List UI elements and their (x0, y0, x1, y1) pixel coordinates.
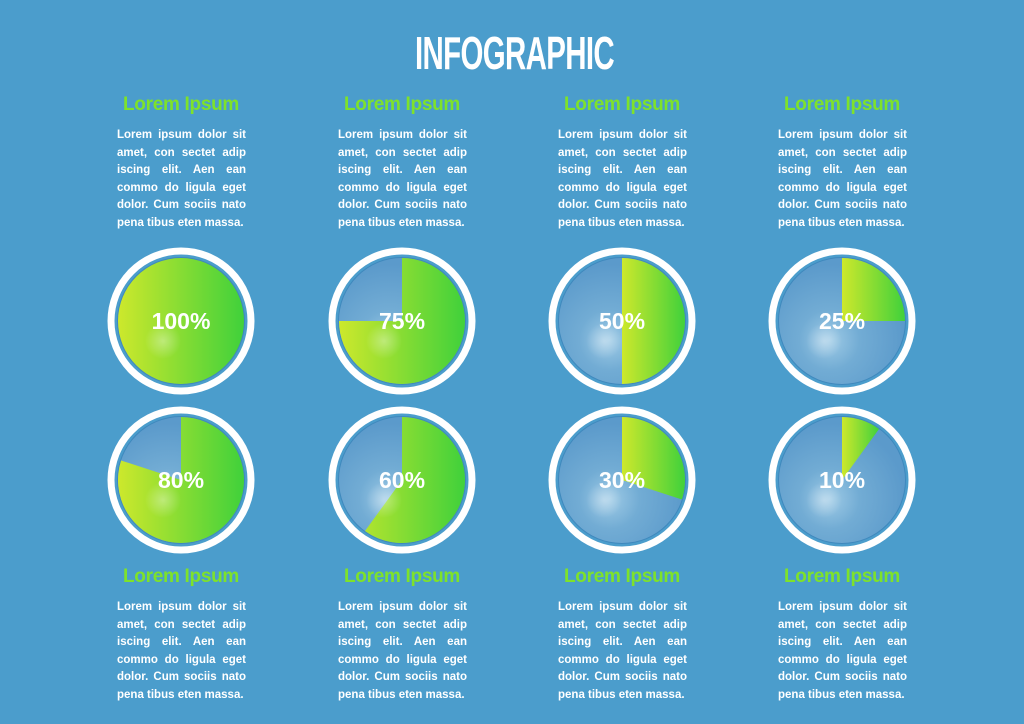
text: col4 bottom (778, 601, 907, 701)
text: col1 bottom: pena tibus eten massa. (117, 689, 244, 701)
text: col4 top: Lorem ipsum dolor sit (778, 129, 907, 141)
heading: col3 bottom: Lorem Ipsum (564, 566, 680, 587)
text: col3 bottom: dolor. Cum sociis nato (558, 671, 687, 683)
text: col2 bottom: Lorem ipsum dolor sit (338, 601, 467, 613)
pie: 30% (552, 410, 692, 550)
text: col4 bottom: dolor. Cum sociis nato (778, 671, 907, 683)
text: col1 top: amet, con sectet adip (117, 147, 246, 159)
text: col2 top: commo do ligula eget (338, 182, 467, 194)
text: col3 bottom: iscing elit. Aen ean (558, 636, 687, 648)
text: col3 top: amet, con sectet adip (558, 147, 687, 159)
heading: col2 top: Lorem Ipsum (344, 94, 460, 115)
pie: 100%: 100% (152, 308, 210, 334)
text: col4 bottom: pena tibus eten massa. (778, 689, 905, 701)
text: col3 top: pena tibus eten massa. (558, 217, 685, 229)
text: col1 bottom: iscing elit. Aen ean (117, 636, 246, 648)
pie: 30%: 30% (599, 467, 645, 493)
pie: 50% (552, 251, 692, 391)
text: col4 top: commo do ligula eget (778, 182, 907, 194)
text: col1 top: commo do ligula eget (117, 182, 246, 194)
text: col3 top: dolor. Cum sociis nato (558, 199, 687, 211)
text: col4 bottom: commo do ligula eget (778, 654, 907, 666)
pie: 25%: 25% (819, 308, 865, 334)
text: col1 top: Lorem ipsum dolor sit (117, 129, 246, 141)
pie: 60%: 60% (379, 467, 425, 493)
heading: col4 top: Lorem Ipsum (784, 94, 900, 115)
pie: 100% (111, 251, 251, 391)
pie: 80% (111, 410, 251, 550)
text: col3 bottom: pena tibus eten massa. (558, 689, 685, 701)
text: col1 bottom: amet, con sectet adip (117, 619, 246, 631)
heading: col1 top: Lorem Ipsum (123, 94, 239, 115)
pie: 80%: 80% (158, 467, 204, 493)
text: col3 bottom: Lorem ipsum dolor sit (558, 601, 687, 613)
text: col1 top: dolor. Cum sociis nato (117, 199, 246, 211)
text: col4 bottom: Lorem ipsum dolor sit (778, 601, 907, 613)
text: col2 bottom: iscing elit. Aen ean (338, 636, 467, 648)
pie: 25% (772, 251, 912, 391)
pie: 60% (332, 410, 472, 550)
text: col2 bottom: dolor. Cum sociis nato (338, 671, 467, 683)
text: col1 bottom: commo do ligula eget (117, 654, 246, 666)
text: col3 top: iscing elit. Aen ean (558, 164, 687, 176)
text: col2 bottom: amet, con sectet adip (338, 619, 467, 631)
text: col2 top: dolor. Cum sociis nato (338, 199, 467, 211)
text: col3 bottom: commo do ligula eget (558, 654, 687, 666)
text: col3 top (558, 129, 687, 229)
title: INFOGRAPHIC (415, 27, 614, 79)
pie: 50%: 50% (599, 308, 645, 334)
heading: col1 bottom: Lorem Ipsum (123, 566, 239, 587)
text: col1 top (117, 129, 246, 229)
text: col4 top: pena tibus eten massa. (778, 217, 905, 229)
text: col2 bottom: commo do ligula eget (338, 654, 467, 666)
text: col2 top: amet, con sectet adip (338, 147, 467, 159)
pie: 10%: 10% (819, 467, 865, 493)
text: col4 bottom: amet, con sectet adip (778, 619, 907, 631)
text: col2 bottom (338, 601, 467, 701)
text: col2 top: Lorem ipsum dolor sit (338, 129, 467, 141)
text: col3 bottom (558, 601, 687, 701)
text: col4 top: amet, con sectet adip (778, 147, 907, 159)
text: col4 top: dolor. Cum sociis nato (778, 199, 907, 211)
text: col3 top: commo do ligula eget (558, 182, 687, 194)
text: col4 top (778, 129, 907, 229)
text: col3 top: Lorem ipsum dolor sit (558, 129, 687, 141)
text: col2 bottom: pena tibus eten massa. (338, 689, 465, 701)
text: col4 top: iscing elit. Aen ean (778, 164, 907, 176)
pie: 75%: 75% (379, 308, 425, 334)
text: col1 bottom: Lorem ipsum dolor sit (117, 601, 246, 613)
text: col1 bottom: dolor. Cum sociis nato (117, 671, 246, 683)
text: col2 top: pena tibus eten massa. (338, 217, 465, 229)
pie: 75% (332, 251, 472, 391)
text: col4 bottom: iscing elit. Aen ean (778, 636, 907, 648)
text: col1 bottom (117, 601, 246, 701)
text: col3 bottom: amet, con sectet adip (558, 619, 687, 631)
heading: col2 bottom: Lorem Ipsum (344, 566, 460, 587)
text: col2 top: iscing elit. Aen ean (338, 164, 467, 176)
text: col1 top: pena tibus eten massa. (117, 217, 244, 229)
text: col2 top (338, 129, 467, 229)
text: col1 top: iscing elit. Aen ean (117, 164, 246, 176)
heading: col4 bottom: Lorem Ipsum (784, 566, 900, 587)
heading: col3 top: Lorem Ipsum (564, 94, 680, 115)
pie: 10% (772, 410, 912, 550)
